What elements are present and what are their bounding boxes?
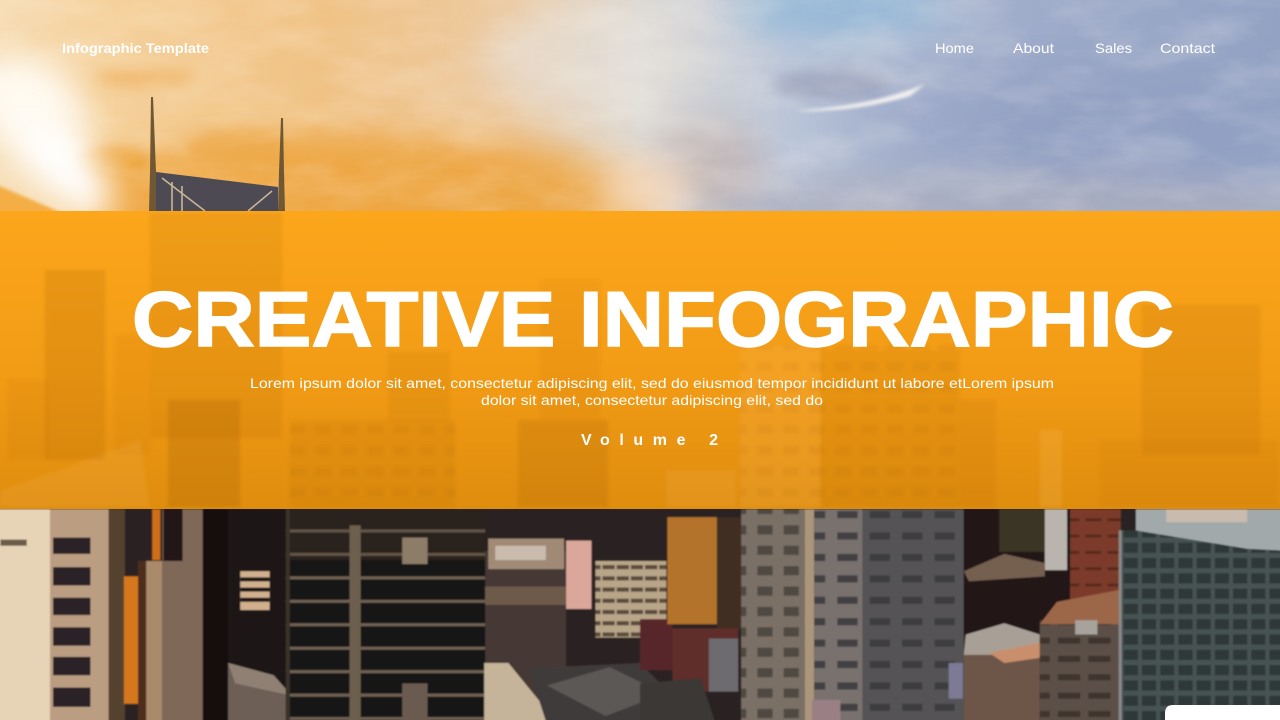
- nav: sales: Sales: [1095, 40, 1132, 56]
- sky with clouds: [0, 0, 1280, 211]
- big dark striped tower: [286, 509, 485, 720]
- dark mid building: [964, 509, 1070, 720]
- glass office tower: [1119, 509, 1280, 720]
- ghosted skyline seen through the band: [0, 213, 1278, 507]
- main title: CREATIVE INFOGRAPHIC: [132, 275, 1174, 363]
- white corner tab: [1165, 705, 1280, 720]
- nav: about: About: [1013, 40, 1054, 56]
- tan building with windows: [50, 509, 109, 720]
- foreground buildings: [0, 509, 1280, 720]
- cream building: [0, 509, 50, 720]
- low rooftops: [484, 539, 680, 720]
- navigation menu: [935, 40, 1215, 56]
- concrete high-rise: [741, 509, 964, 720]
- nav: contact: Contact: [1160, 40, 1215, 56]
- red brick building: [1070, 509, 1121, 601]
- description paragraph: [250, 375, 1054, 408]
- description paragraph: Lorem ipsum dolor sit amet, consectetur adipiscing elit, sed do eiusmod tempor incididunt ut labore etLorem ipsum: [250, 375, 1054, 391]
- brown office building: [1040, 590, 1121, 720]
- nav: home: Home: [935, 40, 974, 56]
- brand name: Infographic Template: [62, 40, 209, 56]
- distant tower with spires: [149, 97, 285, 211]
- description paragraph: dolor sit amet, consectetur adipiscing elit, sed do: [481, 392, 823, 408]
- volume label: Volume 2: [581, 432, 718, 449]
- orange title band: [0, 211, 1280, 509]
